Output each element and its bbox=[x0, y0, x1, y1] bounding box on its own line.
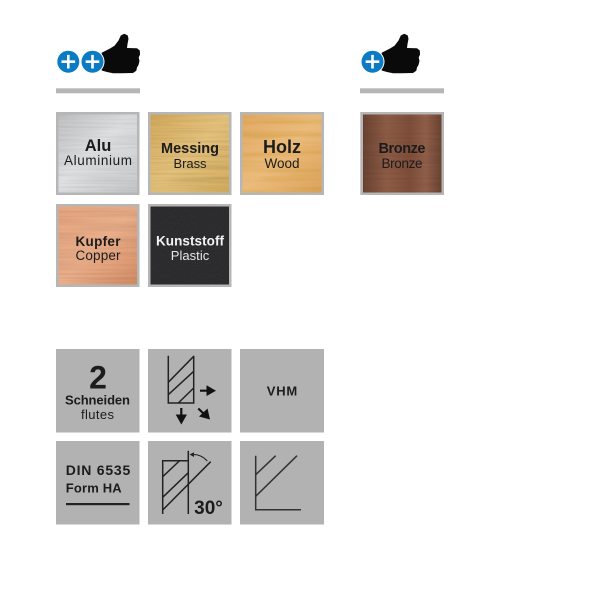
spec tile: DIN 6535 Form HA bbox=[56, 441, 140, 524]
spec tile: 2 flutes: Schneiden bbox=[65, 392, 130, 408]
material tile: wood: Wood bbox=[264, 156, 300, 171]
material tile: bronze: Bronze bbox=[378, 141, 426, 157]
spec tile: 30 degree helix icon: 30° bbox=[194, 498, 223, 519]
spec tile: 30 degree helix icon bbox=[148, 441, 232, 524]
rating icon: one plus, thumbs up bbox=[360, 34, 420, 74]
material tile: brass bbox=[148, 112, 232, 195]
material tile: aluminium: Aluminium bbox=[64, 153, 132, 168]
material tile: brass: Messing bbox=[161, 141, 219, 157]
spec tile: 2 flutes: 2 bbox=[89, 360, 107, 396]
material tile: copper bbox=[56, 204, 140, 287]
material tile: copper: Kupfer bbox=[76, 234, 121, 249]
spec tile: 2 flutes: flutes bbox=[81, 407, 114, 422]
material tile: bronze: Bronze bbox=[382, 156, 422, 171]
spec tile: VHM: VHM bbox=[267, 384, 297, 399]
rating icon: two plus, thumbs up bbox=[57, 34, 140, 74]
material tile: wood bbox=[240, 112, 324, 195]
material tile: aluminium bbox=[56, 112, 140, 195]
spec tile: end mill angle icon bbox=[240, 441, 324, 524]
spec tile: DIN 6535 Form HA: DIN 6535 bbox=[66, 462, 130, 478]
material tile: copper: Copper bbox=[76, 248, 121, 263]
material tile: brass: Brass bbox=[174, 156, 207, 171]
material tile: wood: Holz bbox=[263, 137, 301, 157]
rating underline: right bbox=[360, 88, 444, 93]
material tile: plastic: Plastic bbox=[171, 248, 210, 263]
spec tile: DIN 6535 Form HA: Form HA bbox=[66, 480, 122, 495]
rating underline: left bbox=[56, 88, 140, 93]
material tile: plastic: Kunststoff bbox=[156, 234, 224, 248]
material tile: aluminium: Alu bbox=[85, 137, 111, 155]
material tile: bronze bbox=[360, 112, 444, 195]
spec tile: VHM bbox=[240, 349, 324, 432]
spec tile: 2 flutes bbox=[56, 349, 140, 432]
material tile: plastic bbox=[148, 204, 232, 287]
spec tile: cutting directions icon bbox=[148, 349, 232, 432]
